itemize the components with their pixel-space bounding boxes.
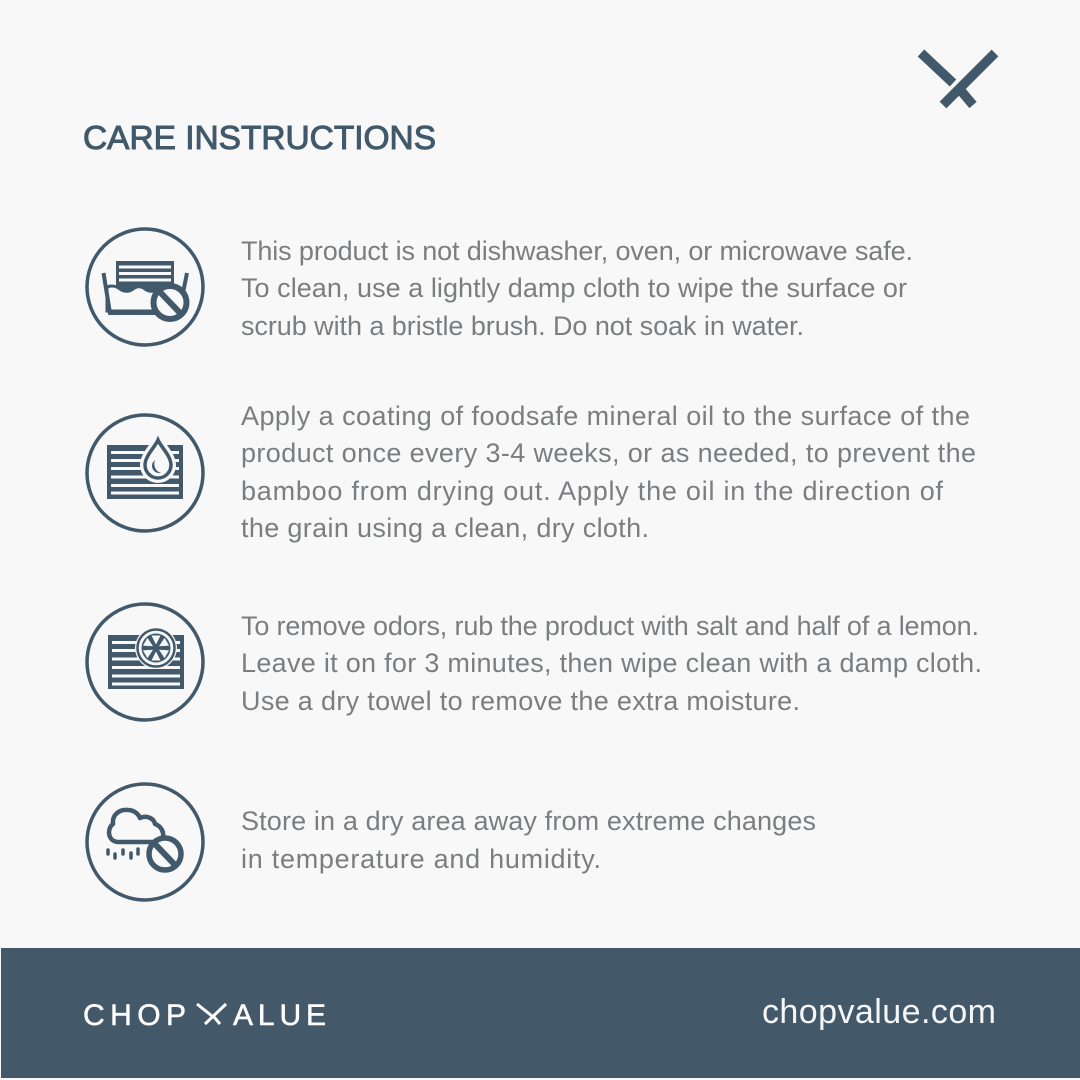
footer logo: CHOP (83, 999, 186, 1032)
text: odor removal instructions: Use a dry towel to remove the extra moisture. (241, 686, 800, 716)
title: CARE INSTRUCTIONS (83, 119, 436, 156)
text: storage instructions (241, 806, 816, 874)
text: odor removal instructions: Leave it on for 3 minutes, then wipe clean with a damp cloth. (241, 648, 982, 678)
text: cleaning instructions: To clean, use a lightly damp cloth to wipe the surface or (241, 273, 907, 303)
text: storage instructions: in temperature and humidity. (241, 844, 601, 874)
text: odor removal instructions: To remove odors, rub the product with salt and half of a lemon. (241, 611, 979, 641)
text: oiling instructions: Apply a coating of foodsafe mineral oil to the surface of the (241, 401, 970, 431)
text: oiling instructions (241, 401, 976, 543)
icon: avoid humidity (87, 784, 203, 900)
icon: lemon on board (87, 604, 203, 720)
text: odor removal instructions (241, 611, 982, 716)
icon: no soaking in water (87, 229, 203, 345)
text: cleaning instructions: This product is not dishwasher, oven, or microwave safe. (241, 236, 913, 266)
text: cleaning instructions (241, 236, 913, 341)
footer logo (83, 999, 326, 1032)
footer logo: ALUE (233, 999, 326, 1032)
footer band (1, 948, 1080, 1078)
footer website: chopvalue.com (762, 993, 996, 1031)
text: cleaning instructions: scrub with a bristle brush. Do not soak in water. (241, 311, 804, 341)
icon: oiling bamboo (87, 415, 203, 531)
text: oiling instructions: the grain using a clean, dry cloth. (241, 513, 649, 543)
icon: crossed chopsticks logo mark (921, 53, 995, 105)
text: storage instructions: Store in a dry area away from extreme changes (241, 806, 816, 836)
text: oiling instructions: bamboo from drying out. Apply the oil in the direction of (241, 476, 943, 506)
text: oiling instructions: product once every 3-4 weeks, or as needed, to prevent the (241, 438, 976, 468)
icon: logo chopsticks (197, 1004, 226, 1024)
